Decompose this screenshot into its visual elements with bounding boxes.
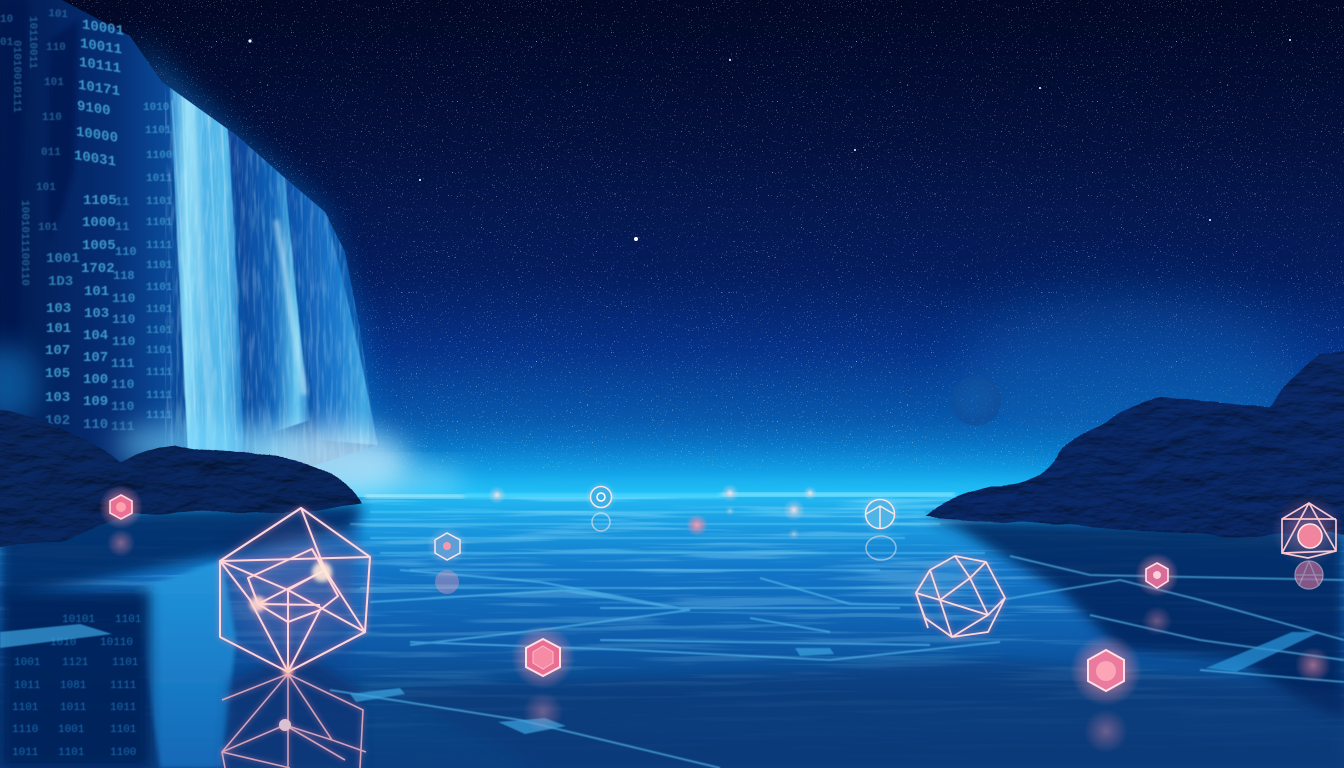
reflected binary digits: 1001 — [14, 657, 41, 669]
orb: right mid reflection — [1142, 606, 1172, 636]
binary digit columns on the cliff: 101 — [44, 77, 64, 89]
binary digit columns on the cliff: 104 — [83, 328, 108, 344]
small white crystals on the horizon — [427, 481, 900, 594]
binary digit columns on the cliff: 10011 — [80, 36, 122, 59]
binary digit columns on the cliff: 11 — [115, 220, 129, 234]
reflected binary digits: 10101 — [62, 614, 95, 626]
binary digit columns on the cliff: 10000 — [76, 124, 118, 147]
binary digit columns on the cliff: 101 — [84, 284, 109, 300]
reflected binary digits: 1101 — [58, 747, 85, 759]
binary digit columns on the cliff: 110 — [112, 312, 136, 327]
reflected binary digits: 1121 — [62, 657, 89, 669]
left shore rocks — [0, 408, 365, 548]
reflected binary digits: 1011 — [12, 747, 39, 759]
orb: right foreground — [1070, 634, 1142, 706]
reflected binary digits: 1001 — [58, 724, 85, 736]
reflected binary digits: 1111 — [110, 680, 137, 692]
distant planet — [951, 376, 1001, 426]
night sky — [0, 0, 1344, 500]
binary digit columns on the cliff: 110 — [42, 112, 62, 124]
reflected binary digits: 1101 — [115, 614, 142, 626]
binary digit columns on the cliff: 110 — [115, 245, 137, 259]
waterfall cliff with water curtains — [0, 0, 380, 470]
binary digit columns on the cliff: 1010 — [143, 102, 169, 114]
orb: right foreground reflection — [1084, 709, 1128, 753]
binary digit columns on the cliff: 103 — [84, 306, 109, 322]
binary digit columns on the cliff: 103 — [45, 390, 70, 406]
pink wireframe cube, far right — [1272, 495, 1344, 567]
binary digit columns on the cliff: 100 — [83, 372, 108, 388]
binary digit columns on the cliff: 1005 — [82, 238, 116, 254]
bright water panels — [0, 624, 1320, 734]
binary digit columns on the cliff: 01 — [0, 37, 14, 49]
orb: far right dim — [1295, 647, 1331, 683]
pink orb crystals — [99, 485, 1331, 753]
binary digit columns on the cliff: 101 — [38, 222, 58, 234]
binary digit columns on the cliff: 101 — [48, 8, 69, 21]
binary digit columns on the cliff: 110 — [46, 42, 66, 54]
binary digit columns on the cliff: 111 — [111, 419, 135, 434]
near-horizon ripples — [350, 512, 1000, 588]
binary digit columns on the cliff: 107 — [45, 343, 70, 359]
horizontal ripples across the sea — [0, 497, 1344, 705]
binary digit columns on the cliff: 01010010111 — [10, 40, 22, 113]
crystal: 447,546 — [427, 526, 467, 566]
binary digit columns on the cliff: 1101 — [145, 125, 172, 137]
binary digit columns on the cliff: 110 — [112, 334, 136, 349]
reflection of the waterfall — [0, 505, 362, 768]
binary digit columns on the cliff: 1111 — [146, 367, 173, 379]
binary digit columns on the cliff: 110 — [112, 291, 136, 306]
right shore rocks — [925, 345, 1344, 535]
star field — [0, 0, 1344, 470]
binary digit columns on the cliff: 1001011100110 — [18, 200, 30, 286]
binary digit columns on the cliff: 1111 — [146, 390, 173, 402]
dark gap between digit columns — [2, 0, 78, 440]
horizon light line — [365, 493, 955, 498]
binary digit columns on the cliff: 109 — [83, 394, 108, 410]
binary digit columns on the cliff: 10110011 — [26, 16, 38, 69]
binary digit columns on the cliff: 1011 — [146, 173, 173, 185]
wireframe sphere, right of centre — [916, 556, 1005, 637]
binary digit columns on the cliff: 1101 — [146, 196, 173, 208]
binary digit columns on the cliff: 110 — [111, 399, 135, 414]
binary digit columns on the cliff: 1111 — [146, 410, 173, 422]
reflected binary digits: 1081 — [60, 680, 87, 692]
binary digit columns on the cliff: 1100 — [146, 150, 172, 162]
binary digit columns on the cliff: 1101 — [146, 345, 173, 357]
binary digit columns on the cliff: 1000 — [82, 215, 116, 231]
binary digit columns on the cliff: 103 — [46, 301, 71, 317]
reflected binary digits: 1011 — [110, 702, 137, 714]
binary digit columns on the cliff: 101 — [46, 321, 71, 337]
reflected binary digits: 10110 — [100, 637, 133, 649]
water curtains — [165, 78, 380, 468]
binary digit columns on the cliff: 10171 — [78, 78, 120, 100]
reflected binary digits: 1100 — [110, 747, 136, 759]
binary digit columns on the cliff: 111 — [111, 356, 135, 371]
glowing grid lines on the water — [330, 556, 1344, 768]
binary digit columns on the cliff: 105 — [45, 366, 70, 382]
binary digit columns on the cliff: 011 — [41, 147, 61, 159]
binary digit columns on the cliff: 10001 — [82, 17, 124, 40]
binary digit columns on the cliff: 102 — [45, 413, 70, 429]
pink wireframe cube reflection — [1295, 561, 1323, 589]
glints at far horizon — [488, 484, 817, 540]
binary digit columns on the cliff: 1111 — [146, 240, 173, 252]
crystal: 601,497 — [585, 481, 617, 513]
waterfall glow behind cliff — [130, 36, 430, 480]
reflected binary digits: 1101 — [12, 702, 39, 714]
reflection of right rocks — [925, 518, 1344, 718]
dark water band in foreground — [380, 660, 1344, 768]
crystal: 447,582 reflection — [435, 570, 459, 594]
reflected binary digits: 1011 — [60, 702, 87, 714]
big wireframe crystal — [220, 508, 370, 676]
orb: foreground centre — [511, 625, 575, 689]
binary digit columns on the cliff: 1105 — [83, 193, 117, 209]
binary digit columns on the cliff: 1702 — [81, 261, 115, 277]
binary digit columns on the cliff — [0, 8, 173, 434]
orb: left shore — [99, 485, 143, 529]
crystal: 880,548 reflection — [866, 536, 896, 560]
crystal: 601,522 reflection — [592, 513, 610, 531]
binary digit columns on the cliff: 107 — [83, 350, 108, 366]
binary digit columns on the cliff: 110 — [111, 377, 135, 392]
binary digit columns on the cliff: 1D3 — [48, 274, 73, 290]
binary digit columns on the cliff: 1101 — [146, 260, 173, 272]
binary digit columns on the cliff: 10031 — [74, 148, 116, 171]
reflected binary digits — [12, 614, 142, 759]
reflected binary digits: 1011 — [14, 680, 41, 692]
orb: foreground centre reflection — [523, 692, 563, 732]
binary digit columns on the cliff: 1101 — [146, 217, 173, 229]
binary digit columns on the cliff: 1101 — [146, 304, 173, 316]
horizon haze — [60, 300, 1300, 516]
binary digit columns on the cliff: 9100 — [77, 99, 111, 120]
binary digit columns on the cliff: 110 — [83, 417, 108, 433]
big wireframe crystal reflection — [222, 674, 366, 768]
binary digit columns on the cliff: 1101 — [146, 282, 173, 294]
reflected binary digits: 1101 — [112, 657, 139, 669]
binary digit columns on the cliff: 1101 — [146, 325, 173, 337]
orb: right mid — [1135, 553, 1179, 597]
binary digit columns on the cliff: 101 — [36, 182, 56, 194]
binary digit columns on the cliff: 118 — [113, 269, 135, 283]
crystal: 880,514 — [860, 494, 900, 534]
reflected binary digits: 1010 — [50, 637, 76, 649]
reflected binary digits: 1110 — [12, 724, 38, 736]
binary digit columns on the cliff: 10 — [0, 14, 13, 26]
binary digit columns on the cliff: 10111 — [79, 55, 121, 77]
sea surface — [0, 497, 1344, 768]
binary digit columns on the cliff: 11 — [115, 195, 129, 209]
orb: centre glint — [686, 514, 708, 536]
orb: left shore reflection — [107, 529, 135, 557]
mist at the waterfall foot — [0, 345, 465, 498]
binary digit columns on the cliff: 1001 — [46, 251, 80, 267]
reflected binary digits: 1101 — [110, 724, 137, 736]
